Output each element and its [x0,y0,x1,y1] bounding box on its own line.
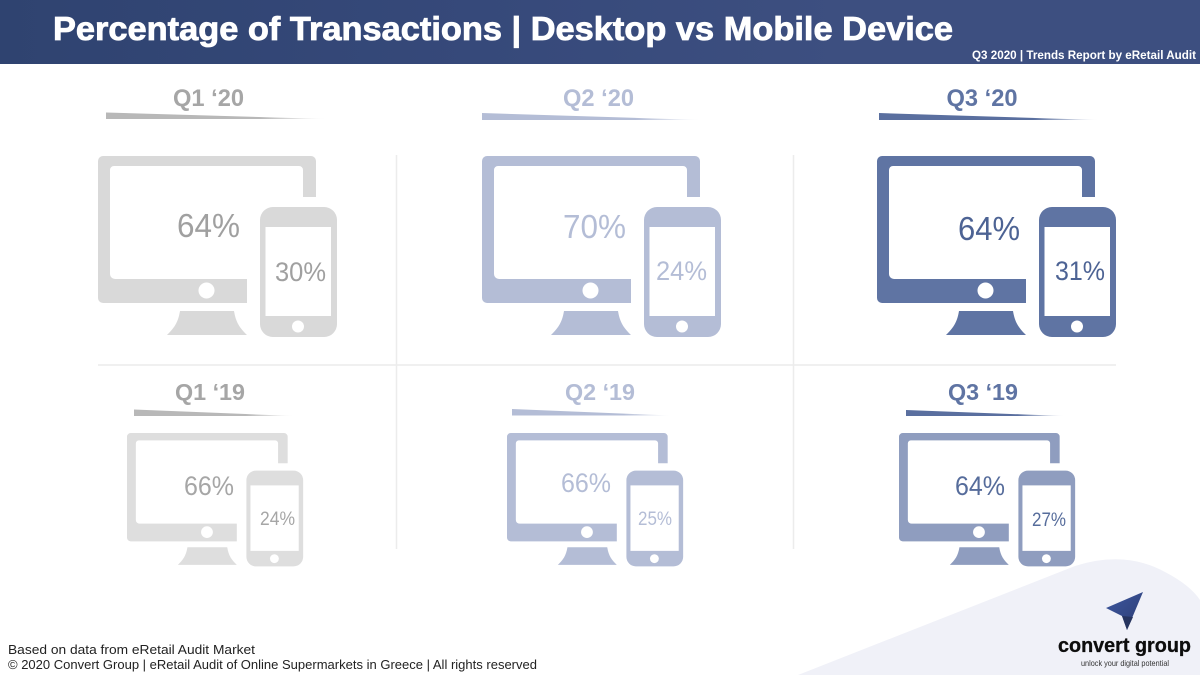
source note: Based on data from eRetail Audit Market [8,642,255,657]
mobile share: 24% [656,256,707,286]
copyright note: © 2020 Convert Group | eRetail Audit of Online Supermarkets in Greece | All rights reserved [8,657,537,672]
report subtitle: Q3 2020 | Trends Report by eRetail Audit [972,50,1196,62]
logo: convert group [1058,592,1191,668]
desktop share: 64% [177,207,240,244]
panel: Q3 2020 [877,85,1116,337]
panel: Q1 2020 [98,85,337,337]
heading: Q3 '20: Q3 ‘20 [946,85,1018,112]
header banner [0,0,1200,64]
title: Percentage of Transactions | Desktop vs Mobile Device [53,10,953,47]
heading underline [879,113,1099,120]
corner background shape [798,559,1200,675]
icon: desktop and phone [507,433,683,566]
icon: desktop and phone [482,156,721,337]
icon: desktop and phone [877,156,1116,337]
panel: Q3 2019 [899,379,1075,566]
panel: Q2 2019 [507,379,683,566]
icon: navigation arrow [1106,592,1143,630]
mobile share: 31% [1055,256,1105,286]
mobile share: 27% [1032,510,1066,531]
heading underline [906,410,1065,416]
heading: Q2 '19: Q2 ‘19 [565,379,635,405]
desktop share: 64% [958,210,1020,247]
icon: desktop and phone [98,156,337,337]
mobile share: 24% [260,509,295,530]
heading: Q2 '20: Q2 ‘20 [563,85,634,112]
heading: Q1 '19: Q1 ‘19 [175,379,245,405]
mobile share: 30% [275,257,326,287]
heading: Q1 '20: Q1 ‘20 [173,85,244,112]
panel: Q2 2020 [482,85,721,337]
desktop share: 66% [561,468,611,498]
desktop share: 70% [563,208,626,245]
heading underline [106,112,327,119]
panel: Q1 2019 [127,379,303,566]
heading underline [512,409,671,416]
heading: Q3 '19: Q3 ‘19 [948,379,1018,405]
mobile share: 25% [638,509,672,530]
icon: desktop and phone [899,433,1075,566]
logo wordmark: convert group [1058,634,1191,657]
grid dividers [98,155,1116,549]
heading underline [134,410,294,416]
icon: desktop and phone [127,433,303,566]
desktop share: 66% [184,471,234,501]
desktop share: 64% [955,471,1005,501]
logo tagline: unlock your digital potential [1081,658,1169,668]
heading underline [482,113,701,120]
